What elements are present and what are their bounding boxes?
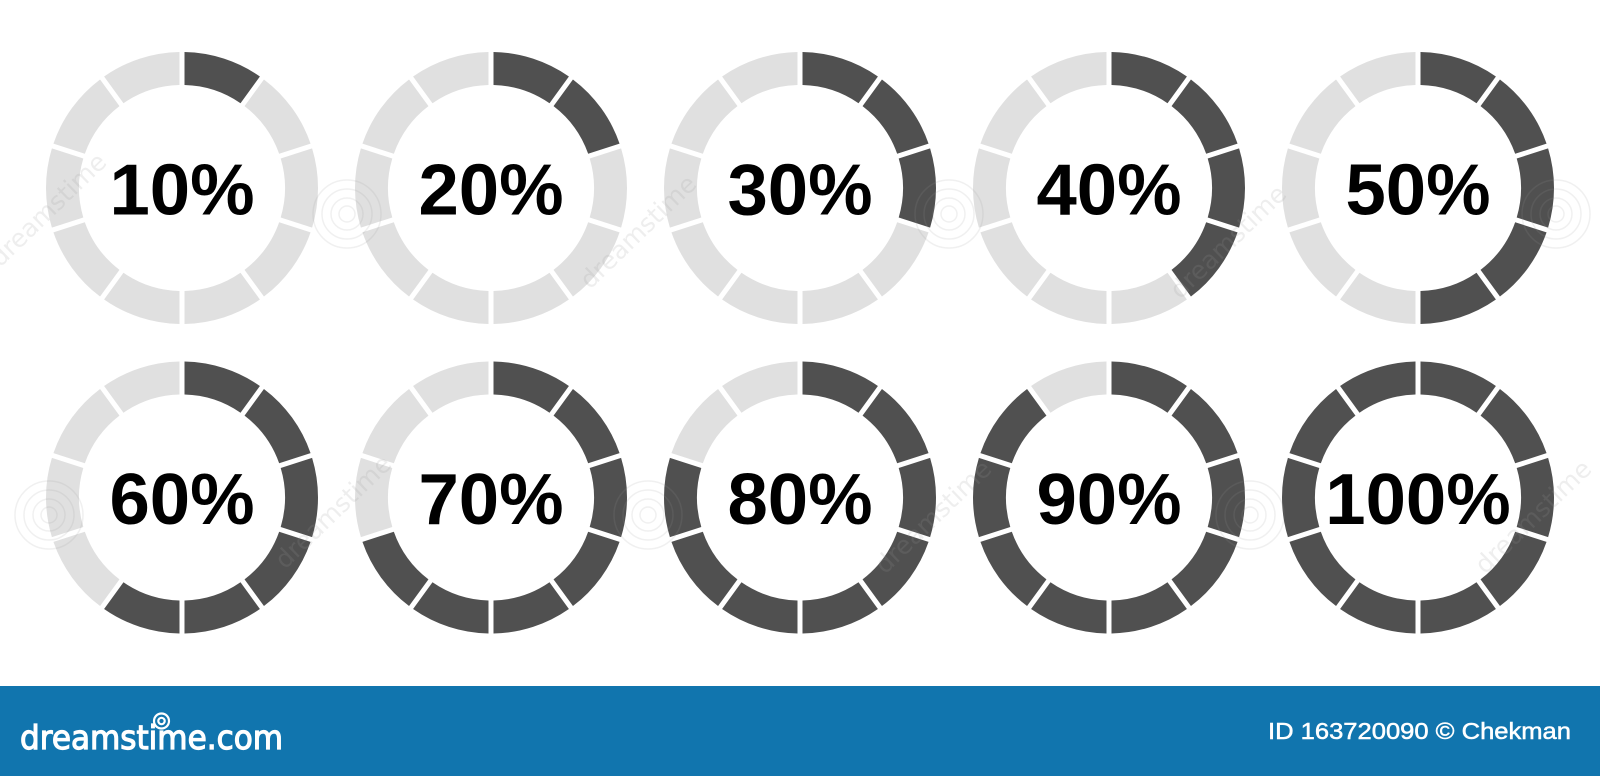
label: 100%: 100%: [1325, 459, 1511, 540]
logo text: dreamstime.com: [20, 718, 283, 757]
watermark overlay: [0, 147, 1597, 579]
ring: 50%: [1265, 32, 1571, 344]
label: 10%: 10%: [109, 150, 255, 230]
ring: 30%: [647, 32, 953, 344]
segments: 3 of 10 filled: [647, 32, 953, 344]
label: 30%: 30%: [727, 150, 873, 230]
segments: 7 of 10 filled: [338, 342, 644, 653]
ring: 80%: [647, 342, 953, 653]
watermark overlay: dreamstime: [1164, 179, 1292, 304]
ring: 70%: [338, 342, 644, 653]
label: 90%: 90%: [1036, 459, 1182, 540]
segments: 10 of 10 filled: [1265, 342, 1571, 653]
image id and credit: ID 163720090 © Chekman: [1268, 718, 1571, 744]
segments: 6 of 10 filled: [29, 342, 335, 653]
segments: 5 of 10 filled: [1265, 32, 1571, 344]
ring: 90%: [956, 342, 1262, 653]
icon: logo spiral: [154, 714, 169, 728]
segments: 9 of 10 filled: [956, 342, 1262, 653]
ring: 100%: [1265, 342, 1571, 653]
watermark overlay: dreamstime: [269, 449, 397, 574]
ring: 40%: [956, 32, 1262, 344]
ring: 20%: [338, 32, 644, 344]
label: 50%: 50%: [1345, 150, 1491, 230]
segments: 4 of 10 filled: [956, 32, 1262, 344]
label: 80%: 80%: [727, 459, 873, 540]
segments: 1 of 10 filled: [29, 32, 335, 344]
label: 70%: 70%: [418, 459, 564, 540]
watermark overlay: dreamstime: [574, 169, 702, 294]
label: 60%: 60%: [109, 459, 255, 540]
segments: 2 of 10 filled: [338, 32, 644, 344]
watermark overlay: dreamstime: [869, 454, 997, 579]
ring: 10%: [29, 32, 335, 344]
label: 40%: 40%: [1036, 150, 1182, 230]
label: 20%: 20%: [418, 150, 564, 230]
segments: 8 of 10 filled: [647, 342, 953, 653]
footer band: [0, 686, 1600, 776]
watermark overlay: dreamstime: [1469, 454, 1597, 579]
ring: 60%: [29, 342, 335, 653]
